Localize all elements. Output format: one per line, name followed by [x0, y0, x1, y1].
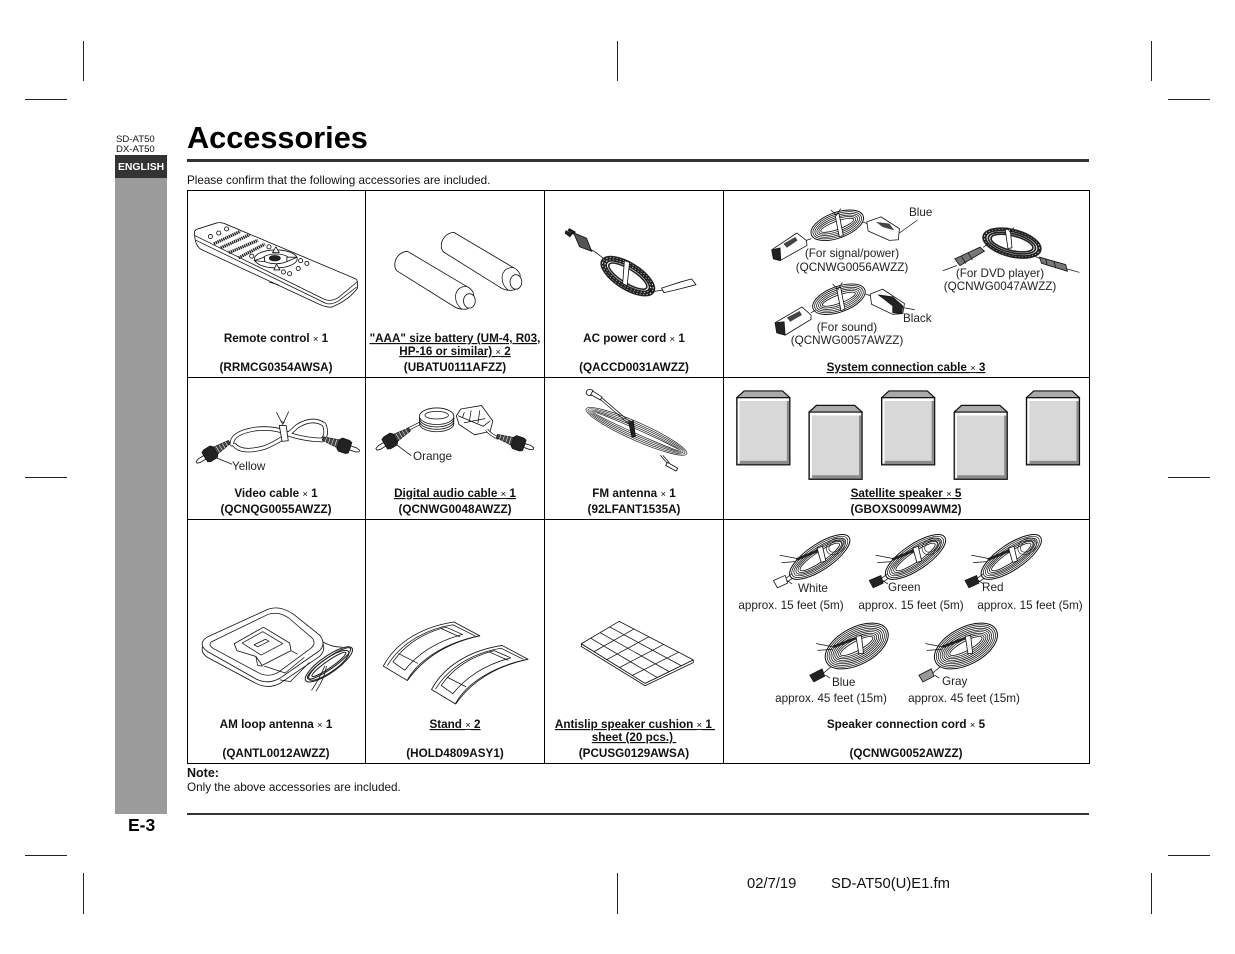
label: for signal/power: (For signal/power) — [805, 247, 899, 260]
icon: AC power cord — [565, 229, 696, 303]
icon: blue cord — [810, 614, 896, 682]
icon: video cable — [193, 412, 361, 468]
panel: antislip speaker cushion — [555, 621, 715, 760]
part number: (PCUSG0129AWSA) — [579, 747, 689, 760]
accessories table grid — [187, 190, 1090, 764]
icon: batteries — [395, 232, 522, 309]
note — [187, 766, 401, 794]
part number: (QCNQG0055AWZZ) — [220, 503, 332, 516]
file stamp — [747, 876, 950, 892]
label: FM antenna: FM antenna × 1 — [592, 487, 676, 500]
part number: (QACCD0031AWZZ) — [579, 361, 689, 374]
label: battery: "AAA" size battery (UM-4, R03, — [370, 332, 540, 345]
label: battery line 2: HP-16 or similar) × 2 — [399, 345, 511, 358]
model names: DX-AT50 — [116, 144, 155, 155]
part number: (RRMCG0354AWSA) — [220, 361, 333, 374]
icon: digital audio cable — [373, 406, 536, 455]
part number: (92LFANT1535A) — [588, 503, 681, 516]
label: Red: Red — [982, 581, 1003, 594]
label: White: White — [798, 582, 828, 595]
label: stand: Stand × 2 — [429, 718, 481, 731]
icon: cushion sheet — [581, 621, 693, 686]
part number: (UBATU0111AFZZ) — [404, 361, 506, 374]
label: Orange: Orange — [413, 450, 452, 463]
label: video cable: Video cable × 1 — [234, 487, 318, 500]
file stamp: SD-AT50(U)E1.fm — [831, 876, 950, 892]
part number: (QANTL0012AWZZ) — [222, 747, 330, 760]
length: red: approx. 15 feet (5m) — [977, 599, 1083, 612]
length: green: approx. 15 feet (5m) — [858, 599, 964, 612]
panel: digital audio cable — [373, 406, 536, 516]
icon: red cord — [965, 527, 1048, 588]
icon: satellite speakers — [737, 391, 1079, 479]
panel: video cable — [193, 412, 361, 516]
icon: white cord — [773, 527, 856, 588]
panel: FM antenna — [582, 389, 690, 516]
part number: (GBOXS0099AWM2) — [850, 503, 962, 516]
title rule — [187, 159, 1089, 162]
icon: AM loop antenna — [202, 608, 357, 691]
icon: signal/power cable — [772, 204, 917, 261]
label: AM loop antenna: AM loop antenna × 1 — [220, 718, 333, 731]
part number: signal/power: (QCNWG0056AWZZ) — [796, 261, 908, 274]
page number: E-3 — [128, 815, 156, 835]
panel: system connection cable — [772, 204, 1079, 374]
label: for DVD player: (For DVD player) — [956, 267, 1044, 280]
sidebar: language tab: ENGLISH — [118, 162, 164, 173]
part number: DVD player: (QCNWG0047AWZZ) — [944, 280, 1056, 293]
length: white: approx. 15 feet (5m) — [738, 599, 844, 612]
label: Black: Black — [903, 312, 932, 325]
file stamp: 02/7/19 — [747, 876, 796, 892]
label: AC power cord: AC power cord × 1 — [583, 332, 685, 345]
label: remote control: Remote control × 1 — [224, 332, 329, 345]
sidebar: language tab — [115, 155, 167, 814]
icon: gray cord — [919, 614, 1005, 682]
icon: stands — [383, 622, 528, 704]
panel: speaker connection cord — [738, 527, 1083, 760]
label: for sound: (For sound) — [817, 321, 877, 334]
label: satellite speaker: Satellite speaker × 5 — [851, 487, 962, 500]
icon: DVD cable — [943, 223, 1079, 272]
label: speaker connection cord: Speaker connection cord × 5 — [827, 718, 986, 731]
panel: remote control — [194, 223, 358, 374]
part number: (HOLD4809ASY1) — [406, 747, 504, 760]
label: Blue: Blue — [909, 206, 932, 219]
part number: (QCNWG0052AWZZ) — [850, 747, 963, 760]
length: blue: approx. 45 feet (15m) — [775, 692, 887, 705]
part number: sound: (QCNWG0057AWZZ) — [791, 334, 903, 347]
label: Green: Green — [888, 581, 920, 594]
model names — [116, 134, 155, 155]
model names: SD-AT50 — [116, 134, 155, 145]
icon: green cord — [869, 527, 952, 588]
icon: FM antenna — [582, 389, 690, 471]
panel: AC power cord — [565, 229, 696, 374]
label: antislip speaker cushion: Antislip speaker cushion × 1 — [555, 718, 715, 731]
note: Note: — [187, 766, 219, 780]
title: Accessories — [187, 120, 368, 155]
label: system connection cable: System connection cable × 3 — [827, 361, 986, 374]
panel: AM loop antenna — [202, 608, 357, 760]
icon: remote control — [194, 223, 358, 307]
label: digital audio cable: Digital audio cable × 1 — [394, 487, 516, 500]
part number: (QCNWG0048AWZZ) — [399, 503, 512, 516]
intro text: Please confirm that the following accessories are included. — [187, 174, 490, 187]
panel: satellite speakers — [737, 391, 1079, 516]
icon: sound cable — [775, 278, 915, 335]
footer rule — [187, 813, 1089, 815]
label: Blue: Blue — [832, 676, 855, 689]
label: Yellow: Yellow — [232, 460, 266, 473]
panel: stand — [383, 622, 528, 760]
label: cushion line 2: sheet (20 pcs.) — [592, 731, 676, 744]
label: Gray: Gray — [942, 675, 967, 688]
panel: battery — [370, 232, 540, 374]
note: Only the above accessories are included. — [187, 781, 401, 794]
length: gray: approx. 45 feet (15m) — [908, 692, 1020, 705]
